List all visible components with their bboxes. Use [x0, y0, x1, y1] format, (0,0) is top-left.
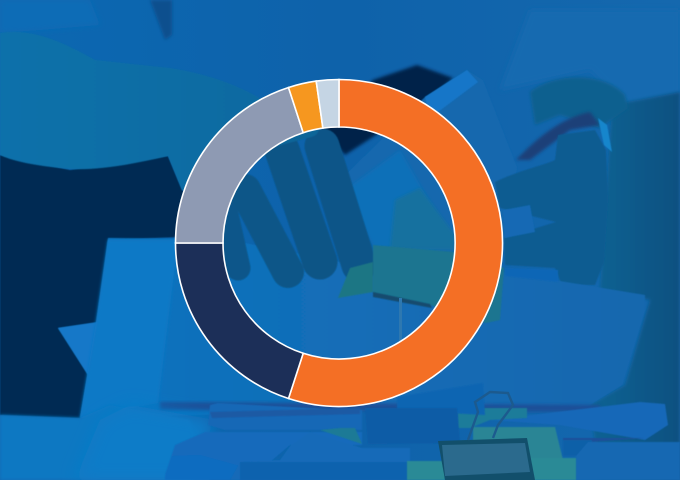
small paper between fingers: [503, 205, 535, 238]
shirt folds: [0, 0, 680, 105]
right wrist: [530, 77, 628, 128]
left forearm: [0, 32, 300, 193]
green binder clip papers: [320, 408, 576, 480]
segment: orange 55%: [288, 80, 503, 406]
blue sticky note: [397, 383, 485, 415]
segment: light blue 2%: [316, 80, 339, 128]
segment: gray 20%: [176, 88, 303, 243]
right hand: [495, 130, 608, 285]
binder clip: [438, 392, 535, 480]
dark shadow behind paper: [320, 65, 453, 155]
watch clasp: [598, 118, 612, 152]
bottom left blur foreground: [0, 405, 210, 480]
segment: amber 3%: [288, 81, 323, 133]
green clip tab: [373, 245, 504, 323]
raised paper top right: [340, 70, 517, 260]
right side dark background: [590, 92, 680, 480]
main paper stack: [80, 238, 645, 418]
paper pile: [165, 402, 680, 480]
segment: navy 20%: [176, 243, 303, 398]
left hand fingers: [225, 128, 370, 285]
dark torso: [0, 155, 230, 418]
donut chart: [176, 80, 503, 406]
watch band: [516, 112, 600, 160]
clip wire: [399, 298, 402, 342]
